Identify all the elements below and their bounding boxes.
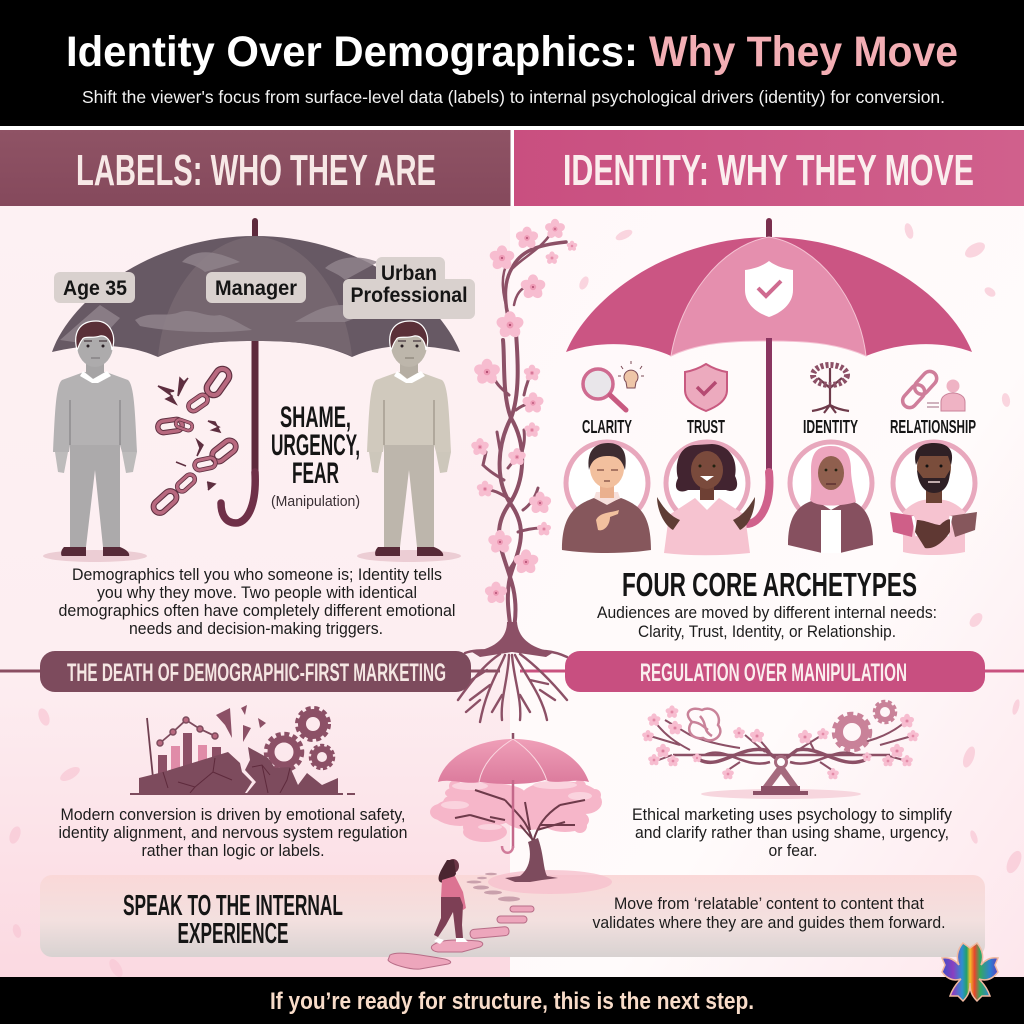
text: archetypes description [597,604,937,641]
text: modern conversion: identity alignment, and nervous system regulation [58,824,408,842]
text: ethical marketing: or fear. [768,842,818,860]
icon: identity tree [812,365,849,413]
heading: speak to the internal experience [123,890,343,950]
title header: Identity Over Demographics: [66,28,638,76]
title header: Shift the viewer's focus from surface-level data (labels) to internal psychological drivers (identity) for conversion. [82,87,945,107]
label: trust: TRUST [687,417,725,437]
icon: relationship chain and person [900,368,965,411]
text: demographics explanation: needs and decision-making triggers. [129,620,383,638]
callout: shame, urgency, fear [271,401,360,510]
text: archetypes description: Clarity, Trust, Identity, or Relationship. [638,623,896,641]
text: modern conversion: rather than logic or labels. [142,842,324,860]
persona: trust [657,442,755,555]
callout: shame, urgency, fear: URGENCY, [271,429,360,462]
text: demographics explanation: you why they move. Two people with identical [97,584,417,602]
central blossom tree [458,219,578,722]
panel heading: labels: LABELS: WHO THEY ARE [76,146,436,195]
grey umbrella [52,221,460,523]
foliage [430,780,602,842]
illustration: person walking [434,859,468,944]
text: move from relatable content: validates where they are and guides them forward. [592,914,946,932]
man: right, beige [357,321,461,562]
icon: rainbow flower logo [942,943,998,1001]
footer bar: If you’re ready for structure, this is the next step. [270,988,754,1015]
callout: shame, urgency, fear: FEAR [292,457,339,490]
illustration: stepping stones [388,873,534,969]
icon: umbrella shield [745,261,793,317]
heading: speak to the internal experience: SPEAK TO THE INTERNAL [123,890,343,922]
icon: broken chains [151,366,238,516]
panel heading: labels [0,130,510,206]
tag: Urban Professional: Professional [350,284,468,307]
label: clarity: CLARITY [582,417,632,437]
callout: shame, urgency, fear: SHAME, [280,401,351,434]
text: demographics explanation: Demographics tell you who someone is; Identity tells [72,566,442,584]
title header [66,28,958,107]
text: ethical marketing [632,806,953,860]
text: archetypes description: Audiences are moved by different internal needs: [597,604,937,622]
icon: crumbling chart and gears [130,705,355,794]
text: ethical marketing: and clarify rather than using shame, urgency, [635,824,949,842]
text: demographics explanation: demographics often have completely different emotional [58,602,456,620]
man: left, grey [43,321,147,562]
pill: death of demographic-first marketing [40,651,471,692]
title header: Why They Move [649,28,958,76]
pink umbrella [566,221,972,524]
icon: balanced scale with branches [641,702,920,799]
label: relationship: RELATIONSHIP [890,417,976,437]
illustration: umbrella tree [430,733,612,894]
tag: Manager: Manager [215,277,297,300]
callout: shame, urgency, fear: (Manipulation) [271,493,360,510]
connector lines behind pills [0,670,1024,672]
text: modern conversion [58,806,408,860]
pill: death of demographic-first marketing: THE DEATH OF DEMOGRAPHIC-FIRST MARKETING [67,659,446,687]
text: modern conversion: Modern conversion is driven by emotional safety, [60,806,406,824]
footer bar [0,977,1024,1024]
persona: clarity [562,442,651,553]
tag: Urban Professional: Urban [381,262,437,285]
persona: relationship [890,442,977,555]
pill: regulation over manipulation [565,651,985,692]
text: demographics explanation [58,566,456,638]
scattered petals [7,222,1024,979]
text: ethical marketing: Ethical marketing uses psychology to simplify [632,806,953,824]
trunk flare [472,622,554,657]
text: move from relatable content [592,895,946,932]
label: identity: IDENTITY [803,417,858,437]
heading: speak to the internal experience: EXPERIENCE [178,918,288,950]
panel heading: identity [514,130,1024,206]
icon: trust shield [685,364,727,411]
panel: speak to the internal experience band [40,875,985,957]
tag: Age 35: Age 35 [63,277,127,300]
text: move from relatable content: Move from ‘relatable’ content to content that [614,895,924,913]
tag: Age 35 [54,272,135,303]
icon: clarity magnifier and bulb [583,361,644,410]
tag: Manager [206,272,306,303]
tag: Urban Professional [343,257,475,319]
persona: identity [788,442,873,553]
